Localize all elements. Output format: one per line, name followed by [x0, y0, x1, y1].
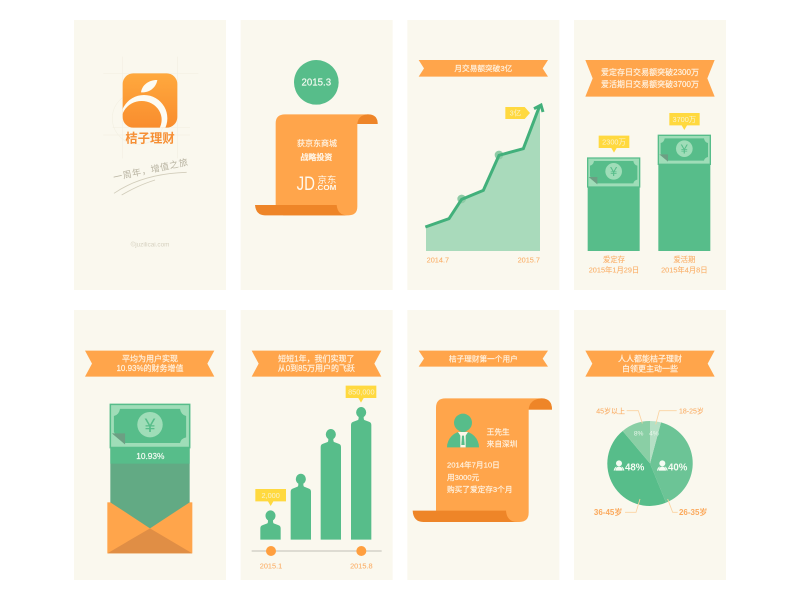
axis labels: 2014.7	[427, 255, 449, 264]
bar: 爱活期: ¥	[680, 142, 689, 156]
banknote	[110, 404, 190, 528]
timeline: 2015.1	[260, 562, 282, 571]
tagline	[112, 156, 189, 195]
callout: 3亿: 3亿	[510, 109, 521, 118]
icon: people	[614, 460, 624, 471]
heading banner	[419, 351, 548, 367]
heading banner: 平均为用户实现	[122, 353, 178, 363]
callout: 850,000	[346, 386, 376, 403]
pie chart: 48%	[625, 462, 645, 473]
pie leaders and labels: 18-25岁	[679, 406, 704, 415]
scroll: 获京东商城	[297, 138, 337, 148]
heading banner: 从0到85万用户的飞跃	[278, 363, 355, 373]
user details: 用3000元	[447, 473, 480, 482]
banknote: ¥	[144, 416, 156, 437]
panel: user growth	[241, 310, 393, 580]
icon: people	[657, 460, 668, 471]
pie leaders and labels: 36-45岁	[594, 507, 622, 517]
heading banner: 白领更主动一些	[622, 364, 678, 374]
bar: 爱活期	[658, 135, 710, 251]
callout: 2300万: 2300万	[602, 138, 626, 147]
axis labels: 2015.7	[518, 255, 540, 264]
callout: 3700万	[669, 113, 700, 130]
panel: daily volume bars	[574, 20, 726, 290]
user details: 购买了爱定存3个月	[447, 484, 513, 494]
title: brand name: 桔子理财	[125, 131, 175, 146]
bar: 爱定存	[588, 158, 640, 251]
date circle: 2015.3	[302, 78, 331, 89]
pie chart: 8%	[634, 431, 644, 438]
panel: envelope growth	[74, 310, 226, 580]
pie leaders and labels	[594, 406, 707, 517]
callout: 2300万	[599, 136, 629, 153]
axis labels	[427, 255, 540, 264]
banknote: 10.93%	[136, 451, 165, 461]
scroll: 战略投资	[300, 152, 332, 162]
user details: 王先生	[487, 426, 510, 436]
heading banner: 短短1年，我们实现了	[278, 353, 354, 363]
heading banner	[85, 351, 214, 377]
heading banner	[585, 60, 715, 97]
JD logo: JD	[297, 174, 315, 195]
user details	[447, 426, 518, 494]
heading banner	[585, 351, 715, 377]
heading banner: 月交易额突破3亿	[454, 63, 513, 73]
tagline: 一周年，增值之旅	[112, 156, 189, 183]
bar labels: 爱活期	[673, 255, 695, 264]
bar labels	[589, 255, 708, 274]
heading banner	[252, 351, 381, 377]
user details: 来自深圳	[487, 439, 518, 449]
copyright: ©juzilicai.com	[131, 240, 169, 248]
heading banner: 人人都能桔子理财	[618, 354, 682, 364]
JD logo: .COM	[315, 185, 337, 192]
JD logo	[297, 174, 337, 195]
heading banner: 10.93%的财务增值	[116, 363, 184, 373]
callout: 3亿	[505, 107, 530, 119]
icon: user avatar	[447, 414, 479, 447]
heading banner	[419, 60, 548, 77]
pie chart	[607, 421, 693, 506]
callout: 3700万: 3700万	[673, 115, 696, 124]
timeline: 2015.8	[350, 562, 373, 571]
panel: age distribution	[574, 310, 726, 580]
timeline	[252, 546, 382, 571]
pie leaders and labels: 26-35岁	[679, 507, 707, 517]
pie leaders and labels: 45岁以上	[596, 406, 625, 415]
callout: 850,000: 850,000	[348, 388, 375, 397]
area chart	[425, 105, 543, 251]
bar labels: 2015年4月8日	[661, 265, 708, 274]
pie chart: 4%	[649, 431, 659, 438]
scroll	[255, 114, 378, 215]
pie chart: 40%	[668, 462, 688, 473]
heading banner: 爱活期日交易额突破3700万	[601, 79, 699, 89]
person bars	[260, 407, 371, 540]
envelope	[107, 502, 192, 553]
panel: JD investment	[241, 20, 393, 290]
icon: orange app logo	[122, 73, 178, 128]
bar labels: 爱定存	[603, 255, 625, 264]
panel: monthly volume	[407, 20, 559, 290]
callout: 2,000: 2,000	[261, 491, 280, 500]
panel: first user	[407, 310, 559, 580]
JD logo: 京东	[318, 174, 336, 185]
bar: 爱定存: ¥	[609, 165, 618, 179]
user details: 2014年7月10日	[447, 460, 500, 470]
bar labels: 2015年1月29日	[589, 265, 639, 274]
heading banner: 桔子理财第一个用户	[449, 354, 518, 364]
scroll	[413, 398, 552, 522]
heading banner: 爱定存日交易额突破2300万	[601, 67, 699, 77]
date circle	[294, 60, 339, 105]
callout: 2,000	[255, 489, 286, 506]
panel: logo splash	[74, 20, 226, 290]
